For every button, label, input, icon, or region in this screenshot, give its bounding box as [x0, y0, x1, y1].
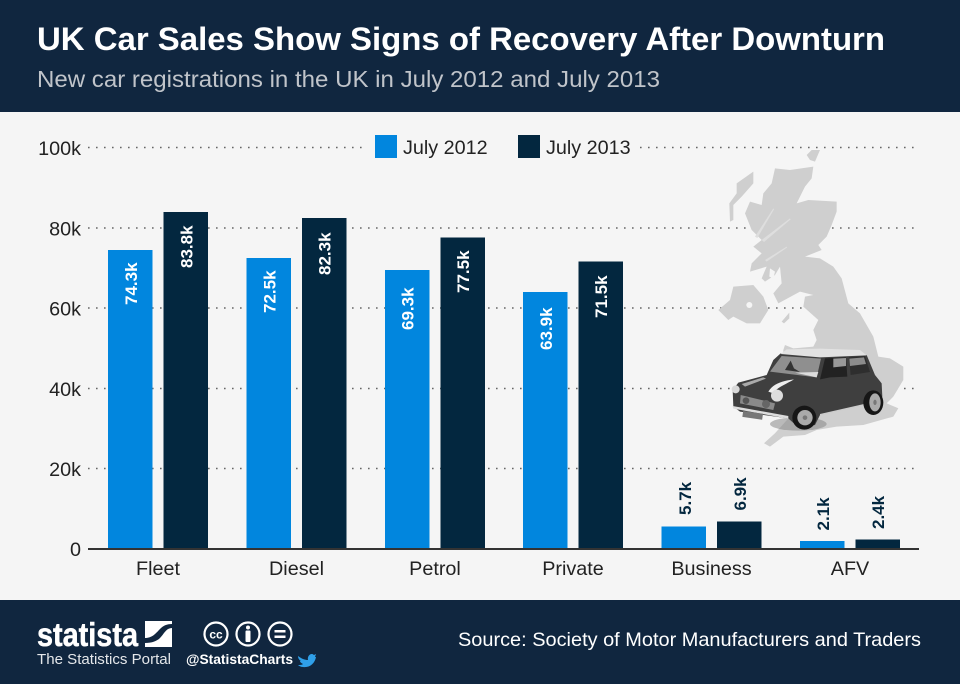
y axis labels: 100k	[38, 138, 81, 160]
group: AFV: 2.1k	[814, 497, 833, 530]
footer band	[0, 600, 960, 684]
x axis labels: Petrol	[409, 558, 461, 580]
grille	[740, 395, 775, 410]
bumper	[733, 406, 788, 419]
car body	[733, 353, 882, 427]
car roof	[781, 349, 867, 357]
x axis line	[88, 548, 919, 550]
y axis labels	[38, 138, 81, 561]
y axis gridlines	[88, 148, 917, 468]
logo mark	[145, 621, 172, 647]
icon: no derivatives	[268, 622, 292, 646]
group: Fleet: 83.8k	[178, 225, 196, 268]
subtitle: New car registrations in the UK in July 2012 and July 2013	[37, 66, 660, 92]
group: Diesel: 72.5k	[260, 270, 280, 313]
legend: July 2013	[518, 135, 631, 159]
bar chart	[108, 212, 900, 549]
y axis labels: 20k	[49, 459, 81, 481]
legend: July 2012: July 2012	[403, 137, 488, 159]
bonnet stripes	[742, 377, 766, 387]
legend	[364, 130, 640, 164]
group: Petrol: 77.5k	[454, 250, 473, 293]
group: Petrol: 69.3k	[398, 287, 418, 330]
side windows	[820, 357, 847, 379]
x axis labels: Diesel	[269, 558, 324, 580]
group: Diesel: 82.3k	[316, 232, 334, 275]
map of the UK	[718, 150, 903, 447]
group: Business: 5.7k	[676, 481, 695, 515]
number plate	[742, 411, 763, 420]
y axis labels: 40k	[49, 379, 81, 401]
group: AFV: 2.4k	[869, 495, 888, 529]
group: Diesel	[246, 218, 346, 549]
car shadow	[770, 417, 827, 431]
group: Fleet	[108, 212, 208, 549]
group: Private	[523, 262, 623, 549]
header band	[0, 0, 960, 112]
licence icons	[204, 622, 292, 646]
icon: cc: cc	[209, 628, 223, 642]
windscreen	[770, 356, 821, 377]
group: Private: 71.5k	[592, 275, 611, 318]
x axis labels: AFV	[831, 558, 870, 580]
x axis labels: Business	[671, 558, 752, 580]
headlights	[732, 385, 740, 393]
legend: July 2013: July 2013	[546, 137, 631, 159]
source: Source: Society of Motor Manufacturers and Traders	[458, 629, 921, 651]
twitter handle: @StatistaCharts	[186, 651, 293, 667]
image: mini car	[732, 349, 883, 431]
group: Private: 63.9k	[537, 307, 556, 350]
y axis labels: 0	[70, 539, 81, 561]
icon: twitter bird	[298, 654, 316, 667]
statista logo: The Statistics Portal	[37, 652, 171, 668]
group: AFV	[800, 495, 900, 549]
group: Fleet: 74.3k	[122, 262, 141, 305]
x axis labels	[136, 558, 870, 580]
x axis labels: Private	[542, 558, 604, 580]
y axis labels: 80k	[49, 218, 81, 240]
y axis labels: 60k	[49, 298, 81, 320]
title: UK Car Sales Show Signs of Recovery After Downturn	[37, 20, 885, 57]
group: Business	[662, 477, 762, 549]
x axis labels: Fleet	[136, 558, 180, 580]
statista logo: statista	[37, 616, 139, 653]
legend: July 2012	[375, 135, 488, 159]
group: Business: 6.9k	[731, 477, 750, 510]
icon: attribution	[236, 622, 260, 646]
side trim	[820, 404, 864, 415]
group: Petrol	[385, 238, 485, 549]
front wheel	[792, 406, 816, 430]
statista logo	[37, 616, 172, 668]
rear wheel	[863, 390, 883, 415]
